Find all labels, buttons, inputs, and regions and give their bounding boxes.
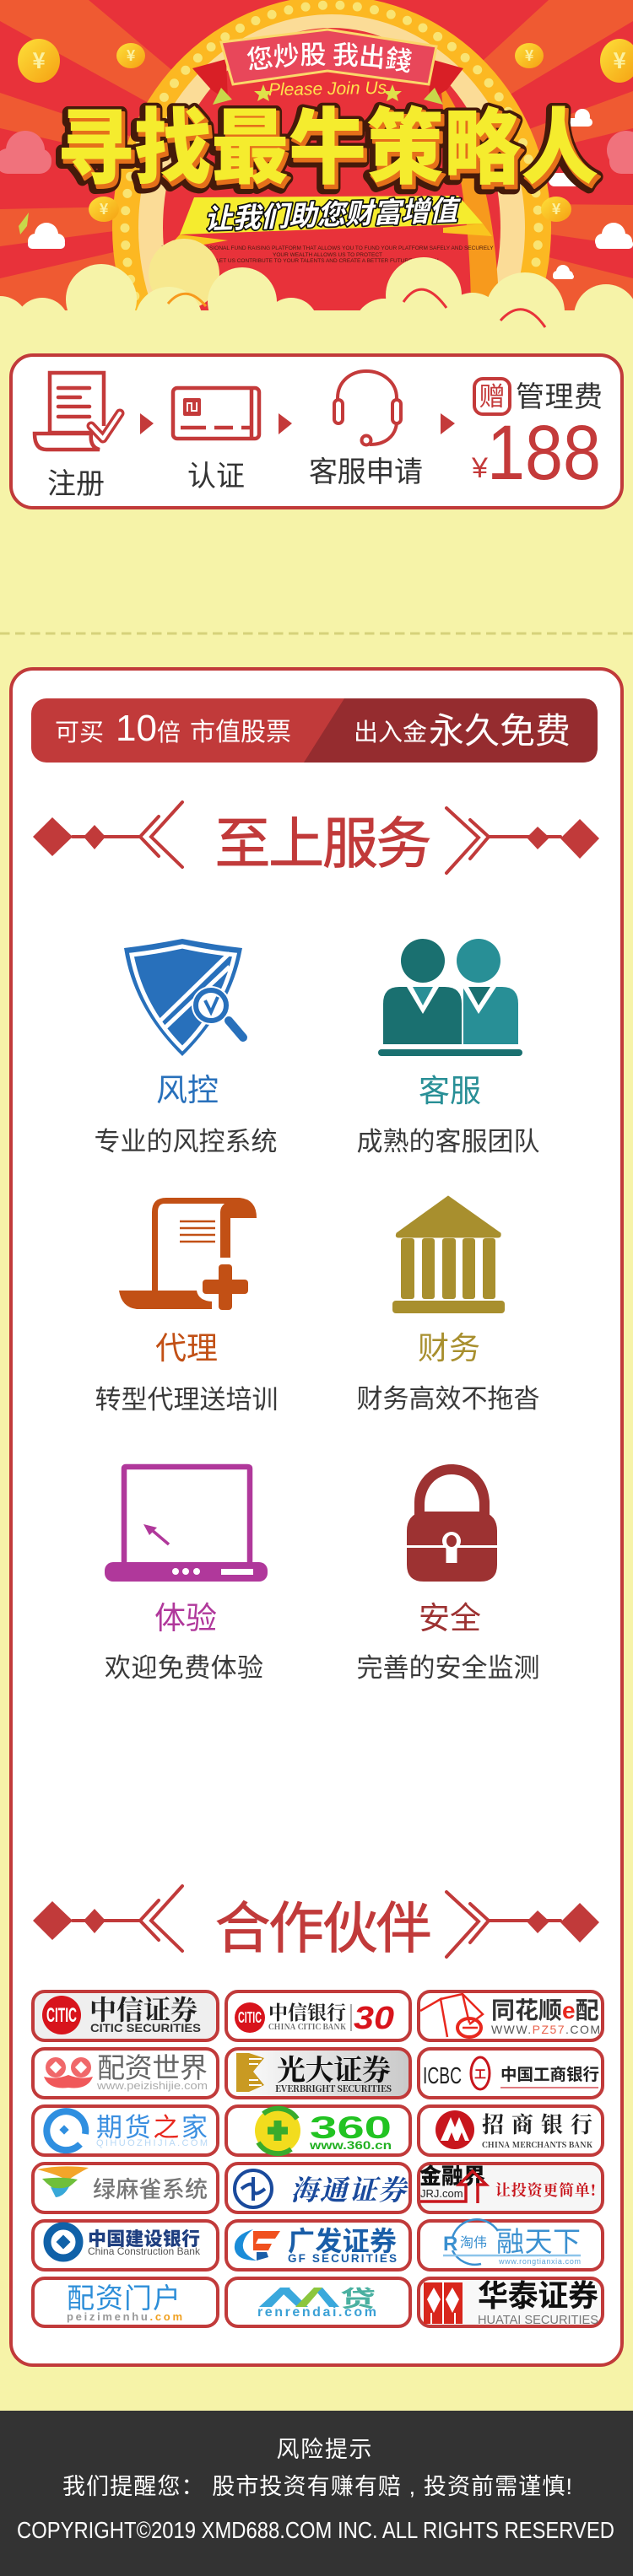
partner: Rong Tianxia <box>419 2219 603 2270</box>
service: security <box>356 1464 540 1683</box>
arrow <box>441 413 455 434</box>
footer <box>0 2411 633 2576</box>
partner: Qihuo Zhijia: 期货之家 <box>96 2113 208 2142</box>
small english tagline: THIS IS A PROFESSIONAL FUND RAISING PLATFORM THAT ALLOWS YOU TO FUND YOUR PLATFORM SAFELY AND SECURELY <box>161 245 494 251</box>
label: 代理 <box>155 1331 218 1366</box>
partner: Everbright Securities <box>226 2047 410 2098</box>
partner: ICBC: 工 <box>474 2067 486 2081</box>
gift badge: 赠 <box>479 382 505 412</box>
partner: Everbright Securities: EVERBRIGHT SECURITIES <box>275 2083 392 2095</box>
icon: shield <box>124 939 243 1056</box>
partner: JRJ <box>419 2164 603 2212</box>
partner: Rong Tianxia: www.rongtianxia.com <box>498 2257 581 2266</box>
partner: Peizi Shijie <box>33 2049 218 2098</box>
promo pill: 出入金 <box>354 719 427 746</box>
description: 欢迎免费体验 <box>105 1653 263 1683</box>
label: verification: 认证 <box>187 461 245 493</box>
partner: Qihuo Zhijia: QIHUOZHIJIA.COM <box>96 2138 208 2148</box>
partner: GF Securities <box>226 2221 410 2270</box>
partner: 360 <box>226 2106 410 2155</box>
description: 转型代理送培训 <box>95 1385 279 1415</box>
partner: Rong Tianxia: 融天下 <box>496 2226 581 2257</box>
main title: 寻找最牛策略人 <box>59 105 601 197</box>
icon: padlock <box>407 1464 497 1582</box>
small english tagline <box>162 246 493 262</box>
promo pill: 倍 <box>157 719 181 746</box>
label: management fee: 管理费 <box>516 381 603 413</box>
partner: ICBC: ICBC <box>423 2062 462 2088</box>
partner: ICBC <box>419 2049 603 2098</box>
description: 成熟的客服团队 <box>356 1127 540 1156</box>
partner: Renrendai: renrendai.com <box>257 2305 376 2320</box>
heading: partners: 合作伙伴 <box>214 1897 432 1959</box>
ribbon slogan <box>192 29 463 105</box>
partner: Haitong Securities: 海通证券 <box>290 2169 408 2208</box>
label: 风控 <box>156 1073 219 1107</box>
heading ornament: partners <box>33 1886 599 1957</box>
partner: 360: 360 <box>310 2110 392 2145</box>
service: trial <box>105 1467 268 1683</box>
icon: headset <box>334 371 401 445</box>
partner: China CITIC Bank: 中信银行 <box>268 1997 346 2025</box>
partner: China CITIC Bank: CHINA CITIC BANK <box>268 2021 346 2032</box>
service: finance <box>356 1196 540 1414</box>
partner: Peizi Menhu <box>33 2278 218 2326</box>
panel: services and partners <box>11 669 622 2365</box>
partner: China Construction Bank: China Construction Bank <box>88 2245 201 2257</box>
partner: Lv Maque: 绿麻雀系统 <box>93 2177 208 2202</box>
partner: China Merchants Bank <box>419 2106 603 2155</box>
partner: 10jqka e-pei: WWW.PZ57.COM <box>491 2023 600 2036</box>
gold coins <box>18 39 633 222</box>
partner: Peizi Shijie: www.peizishijie.com <box>96 2080 208 2092</box>
partner: JRJ: JRJ.com <box>420 2187 463 2200</box>
service: risk control <box>95 939 277 1156</box>
heading: services: 至上服务 <box>214 812 432 875</box>
partner: CITIC Securities: 中信证券 <box>89 1989 197 2028</box>
partner: ICBC: 中国工商银行 <box>500 2066 599 2084</box>
gold coins: ¥ <box>613 44 626 75</box>
partner: 360: www.360.cn <box>309 2138 392 2152</box>
partner: China CITIC Bank: 30 <box>354 2001 394 2036</box>
gold coins: ¥ <box>100 197 109 219</box>
partner: Qihuo Zhijia <box>33 2106 218 2155</box>
partner: Peizi Menhu: 配资门户 <box>67 2282 181 2314</box>
partner: JRJ: 金融界 <box>419 2164 485 2189</box>
label: 安全 <box>419 1601 481 1636</box>
partner: China CITIC Bank <box>226 1991 410 2040</box>
partner: Peizi Menhu: peizimenhu.com <box>67 2310 182 2323</box>
label: customer service application: 客服申请 <box>309 456 423 488</box>
yellow subtitle ribbon <box>175 195 492 245</box>
heading ornament: services <box>33 802 599 873</box>
promo pill: 10 <box>116 708 157 749</box>
gold coins: ¥ <box>525 44 534 66</box>
arrow <box>140 413 154 434</box>
price: ¥ <box>471 452 488 484</box>
partner: 10jqka e-pei: 同花顺e配 <box>491 1997 599 2024</box>
partner: Rong Tianxia: R <box>443 2233 457 2255</box>
partner: JRJ: 让投资更简单! <box>495 2179 596 2201</box>
label: 体验 <box>154 1601 217 1636</box>
risk notice text: 我们提醒您： 股市投资有赚有赔 , 投资前需谨慎! <box>62 2474 572 2499</box>
description: 专业的风控系统 <box>95 1127 277 1156</box>
partner: China Merchants Bank: CHINA MERCHANTS BANK <box>482 2138 593 2150</box>
ribbon slogan: Please Join Us <box>268 78 387 100</box>
service: customer support <box>356 939 540 1156</box>
icon: laptop <box>105 1467 268 1582</box>
partner: CITIC Securities <box>33 1989 218 2040</box>
golden arch <box>112 0 551 310</box>
partner: Lv Maque <box>33 2164 218 2212</box>
main title: 寻找最牛策略人 <box>57 105 598 197</box>
promo pill: 市值股票 <box>190 719 291 746</box>
partner: Rong Tianxia: 淘伟 <box>460 2235 487 2250</box>
cream clouds <box>0 239 633 337</box>
gold coins: ¥ <box>32 44 46 75</box>
partner: Haitong Securities <box>226 2164 410 2212</box>
small english tagline: YOUR WEALTH ALLOWS US TO PROTECT <box>273 252 382 258</box>
partner: GF Securities: GF SECURITIES <box>288 2252 397 2265</box>
partner: China Construction Bank <box>33 2221 218 2270</box>
promo pill <box>31 698 598 763</box>
partner: Everbright Securities: 光大证券 <box>277 2047 391 2088</box>
small english tagline: LET US CONTRIBUTE TO YOUR TALENTS AND CREATE A BETTER FUTURE FOR YOU <box>216 258 439 264</box>
main title: 寻找最牛策略人 <box>57 101 598 194</box>
arrow <box>279 413 292 434</box>
icon: team <box>378 939 522 1056</box>
partner: Renrendai: 贷 <box>340 2287 376 2312</box>
icon: id card <box>173 388 259 439</box>
label: register: 注册 <box>47 468 105 500</box>
white clouds <box>28 109 633 279</box>
service: agency <box>95 1198 279 1415</box>
description: 完善的安全监测 <box>356 1653 540 1683</box>
label: 客服 <box>419 1074 481 1108</box>
partner: Peizi Shijie: 配资世界 <box>97 2052 208 2083</box>
partner: 10jqka e-pei <box>419 1991 603 2040</box>
partner: Huatai Securities: HUATAI SECURITIES <box>478 2313 598 2327</box>
icon: registration document <box>35 373 120 450</box>
icon: bank <box>392 1196 505 1313</box>
description: 财务高效不拖沓 <box>356 1384 540 1414</box>
partner: GF Securities: 广发证券 <box>288 2226 397 2256</box>
pink clouds <box>0 131 633 174</box>
label: 财务 <box>418 1331 480 1366</box>
promo pill: 永久免费 <box>429 711 571 751</box>
partner: Huatai Securities <box>419 2278 603 2327</box>
partner: CITIC Securities: CITIC <box>46 2004 77 2027</box>
yellow subtitle ribbon: 让我们助您财富增值 <box>203 188 463 237</box>
icon: scroll with plus <box>119 1198 257 1310</box>
promo pill: 可买 <box>55 719 104 746</box>
gift badge <box>474 379 510 414</box>
hero banner <box>0 0 633 328</box>
partner: China Construction Bank: 中国建设银行 <box>88 2228 200 2250</box>
ribbon slogan: 您炒股 我出錢 <box>246 42 412 73</box>
partner: Huatai Securities: 华泰证券 <box>478 2278 598 2313</box>
gold coins: ¥ <box>552 197 561 219</box>
partner: China Merchants Bank: 招商银行 <box>482 2108 592 2139</box>
panel: onboarding steps <box>11 355 622 508</box>
partner: Renrendai <box>226 2278 410 2326</box>
partner: CITIC Securities: CITIC SECURITIES <box>90 2022 201 2034</box>
risk notice title: 风险提示 <box>277 2437 371 2462</box>
price: 188 <box>487 410 601 496</box>
dashed divider <box>0 633 633 634</box>
gold coins: ¥ <box>127 44 136 66</box>
partner: China CITIC Bank: CITIC <box>238 2009 262 2026</box>
